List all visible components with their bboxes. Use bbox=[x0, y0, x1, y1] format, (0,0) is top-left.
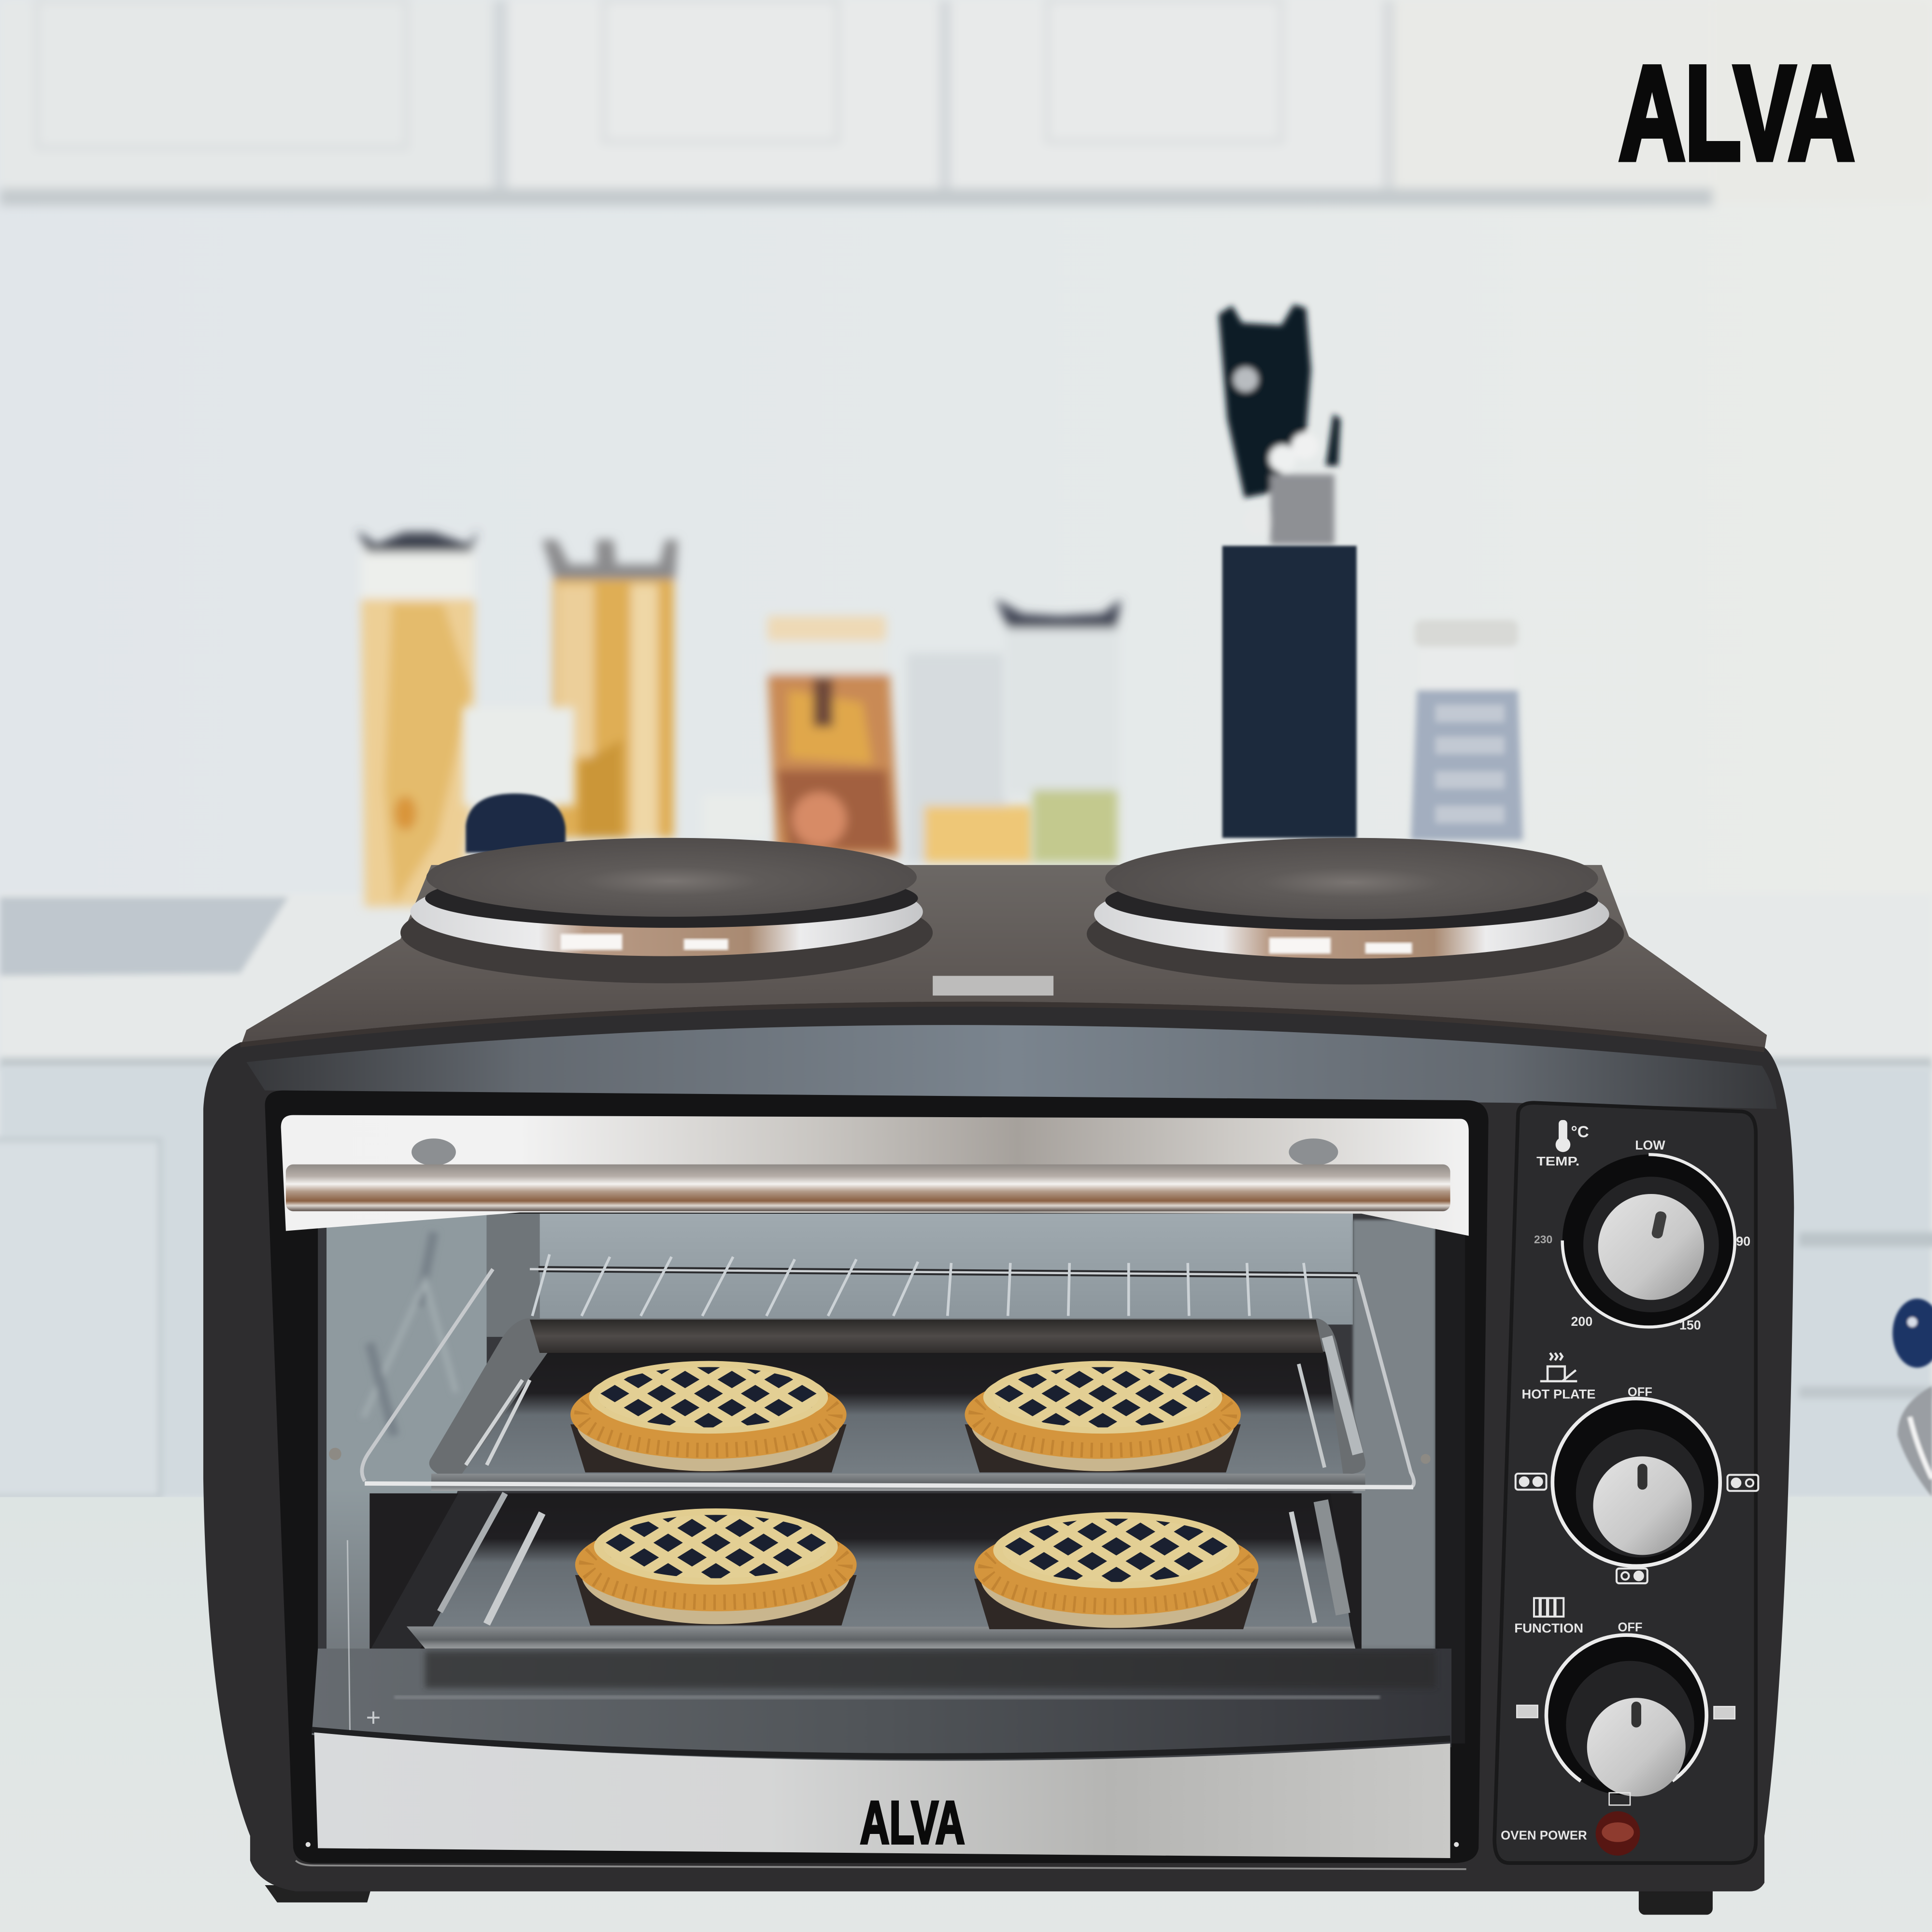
jar: spaghetti bbox=[542, 540, 678, 838]
temperature scale: 90 bbox=[1736, 1234, 1750, 1249]
upper tray bbox=[429, 1319, 1365, 1491]
jar: faint glass bbox=[702, 653, 1033, 863]
lower tray bbox=[369, 1493, 1362, 1651]
handle supports bbox=[412, 1138, 1338, 1165]
temperature scale bbox=[1534, 1138, 1750, 1333]
upper cabinets bbox=[0, 0, 1932, 206]
function icon bbox=[1534, 1598, 1563, 1617]
right door shade bbox=[1435, 1214, 1465, 1744]
temperature scale: 200 bbox=[1571, 1314, 1592, 1329]
door handle bbox=[286, 1165, 1450, 1211]
front top band bbox=[246, 1025, 1777, 1109]
label: hot plate: HOT PLATE bbox=[1522, 1387, 1596, 1401]
left inner post bbox=[487, 1214, 540, 1337]
oven top surface bbox=[240, 865, 1767, 1050]
oven interior bbox=[318, 1214, 1465, 1744]
jar: green bbox=[995, 599, 1121, 863]
pie: lower right bbox=[891, 1511, 1342, 1629]
right glass wall bbox=[1353, 1220, 1435, 1651]
left hot plate bbox=[400, 838, 933, 983]
control panel bbox=[1494, 1103, 1758, 1863]
right hot plate bbox=[1087, 838, 1624, 984]
label: temp: TEMP. bbox=[1536, 1155, 1579, 1168]
lower door trim line bbox=[296, 1861, 1466, 1869]
front counter bbox=[0, 1497, 1932, 1932]
top lip line bbox=[240, 1004, 1764, 1050]
small jar cap bbox=[466, 794, 566, 852]
lower door glass bbox=[312, 1540, 1451, 1764]
grater bbox=[1411, 620, 1523, 840]
glass reflection left bbox=[364, 1232, 456, 1435]
oven body bbox=[203, 1002, 1794, 1891]
temperature scale: 230 bbox=[1534, 1233, 1552, 1246]
door logo: ALVA bbox=[860, 1789, 965, 1856]
label: off function: OFF bbox=[1618, 1621, 1642, 1634]
upper wire rack back bbox=[530, 1254, 1358, 1319]
oven feet bbox=[265, 1885, 1713, 1915]
rating label bbox=[933, 976, 1053, 995]
back wall bbox=[540, 1214, 1353, 1324]
upper rack front bbox=[362, 1269, 1414, 1487]
lower left wall bbox=[327, 1489, 458, 1694]
label: off: OFF bbox=[1628, 1385, 1652, 1399]
left glass wall bbox=[327, 1214, 487, 1491]
jar: pasta bbox=[357, 530, 478, 907]
temperature icon: °C bbox=[1571, 1123, 1589, 1141]
hot plate knob bbox=[1552, 1398, 1720, 1566]
label: function: FUNCTION bbox=[1514, 1621, 1583, 1635]
whisk at right edge bbox=[1892, 1299, 1932, 1497]
temperature scale: LOW bbox=[1635, 1138, 1665, 1152]
temperature scale: 150 bbox=[1679, 1318, 1701, 1333]
hot plate positions bbox=[1516, 1474, 1758, 1583]
temperature icon bbox=[1556, 1120, 1589, 1152]
stainless door plate bbox=[314, 1733, 1450, 1858]
label: oven power: OVEN POWER bbox=[1501, 1829, 1587, 1843]
oven bbox=[203, 838, 1794, 1915]
door screws bbox=[306, 1448, 1459, 1847]
back counter bbox=[0, 893, 1932, 1069]
knife block bbox=[1219, 304, 1357, 838]
temperature knob bbox=[1563, 1154, 1735, 1327]
function knob bbox=[1515, 1604, 1738, 1827]
door edge shadow bbox=[312, 1730, 1450, 1756]
hot plate icon bbox=[1540, 1353, 1577, 1381]
jar: spices bbox=[767, 616, 899, 856]
function positions bbox=[1517, 1705, 1735, 1805]
door frame bbox=[265, 1091, 1489, 1863]
pie: lower left bbox=[492, 1508, 939, 1625]
pie: upper right bbox=[883, 1360, 1322, 1472]
small jar bbox=[463, 707, 574, 806]
lower cabinets bbox=[0, 1067, 1932, 1498]
power lamp bbox=[1596, 1811, 1640, 1856]
pie: upper left bbox=[489, 1360, 928, 1472]
door handle panel bbox=[281, 1115, 1469, 1236]
